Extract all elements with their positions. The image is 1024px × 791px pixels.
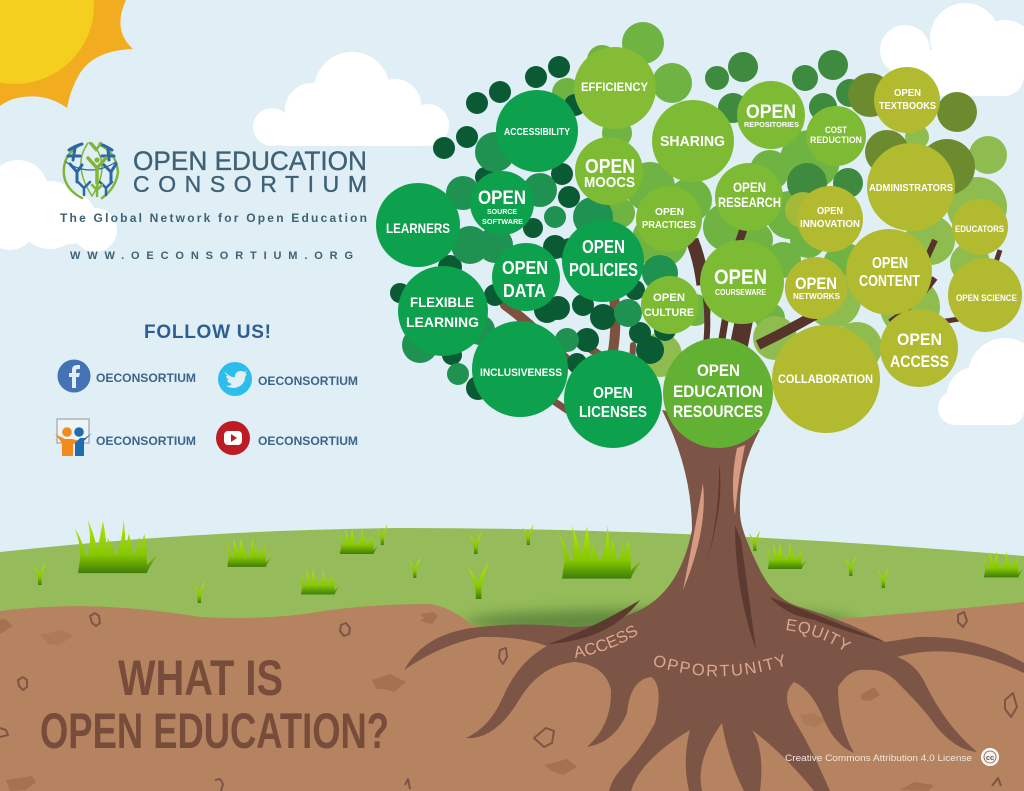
bubble: Inclusiveness: INCLUSIVENESS [480,367,562,379]
bubble: Open Source Software: SOFTWARE [482,217,523,226]
cloud: left [0,160,117,252]
bubble: Open Policies: OPEN [582,237,625,257]
icon: facebook [58,360,90,392]
bubble: Open Practices: OPEN [655,206,684,218]
icon: youtube [216,421,250,455]
bubble: Learners [376,183,460,267]
license text: Creative Commons Attribution 4.0 License [785,753,972,764]
bubble: Open MOOCs: OPEN [585,156,635,178]
green hill [0,528,1024,640]
bubble: Learners: LEARNERS [386,221,450,236]
bubble: Open Science [948,258,1022,332]
tree trunk and roots [404,410,1024,791]
bubble: Open Education Resources [663,338,773,448]
ground shadow [465,609,855,635]
root label: Opportunity: OPPORTUNITY [654,654,784,676]
bubble: Open Content: OPEN [872,255,908,272]
right branches [692,222,1000,350]
bubble: Educators: EDUCATORS [955,224,1004,234]
bubble: Open Licenses: OPEN [593,385,633,402]
bubble: Open Education Resources: RESOURCES [673,403,763,421]
bubble: Inclusiveness [472,321,568,417]
bubble: Administrators [867,143,955,231]
title [40,650,389,759]
bubble: Open Education Resources: EDUCATION [673,383,763,401]
bubble: Open Source Software [470,171,534,235]
bubble: Administrators: ADMINISTRATORS [869,182,953,194]
bubble: Open Research: RESEARCH [718,194,781,210]
cloud: top right [880,3,1024,96]
title: OPEN EDUCATION? [40,703,389,759]
bubble: Open Networks: OPEN [795,274,837,293]
bubble: Open Access: OPEN [897,330,942,349]
handle: facebook: OECONSORTIUM [96,371,196,385]
bubble: Open Access: ACCESS [890,352,949,371]
handle: youtube: OECONSORTIUM [258,434,358,448]
bubble: Sharing [652,100,734,182]
title: WHAT IS [118,650,283,706]
bubble: Open Innovation [797,186,863,252]
bubble: Accessibility [496,90,578,172]
sun [0,0,133,108]
bubble: Open Networks: NETWORKS [793,291,840,301]
soil [0,602,1024,791]
bubble: Open Data [492,243,560,311]
bubble: Open Innovation: OPEN [817,206,843,217]
logo globe [64,143,118,198]
bubble: Open Culture: OPEN [653,292,685,304]
bubble: Cost Reduction: REDUCTION [810,135,862,145]
bubble: Open Data: OPEN [502,258,548,278]
tree foliage background [390,22,1007,400]
tagline: The Global Network for Open Education [60,211,367,225]
handle: twitter: OECONSORTIUM [258,374,358,388]
bubble: Open Culture [641,276,699,334]
bubble: Open Repositories: REPOSITORIES [744,120,799,129]
soil stones and patches [0,612,1017,791]
bubble: Cost Reduction [806,106,866,166]
cloud: top centre [253,52,449,146]
bubble: Flexible Learning [398,266,488,356]
bubble: Open Networks [785,257,847,319]
logo wordmark [133,146,367,197]
follow us heading: FOLLOW US! [144,322,271,343]
bubble: Open Practices: PRACTICES [642,219,696,231]
bubble: Open Source Software: SOURCE [487,207,517,216]
bubble: Flexible Learning: FLEXIBLE [410,294,474,310]
bubble: Open Education Resources: OPEN [697,362,740,380]
bubble: Open Textbooks [874,67,940,133]
bubble: Efficiency: EFFICIENCY [581,80,648,94]
bubble: Flexible Learning: LEARNING [406,314,479,330]
bubble: Open Licenses [564,350,662,448]
logo wordmark: OPEN EDUCATION [133,146,367,176]
bubble: Open Access [880,309,958,387]
bubble: Sharing: SHARING [660,133,725,150]
bubble: Open Innovation: INNOVATION [800,219,860,230]
bubble: Open Source Software: OPEN [478,188,526,209]
cloud: lower right [938,338,1024,425]
bubble: Open Culture: CULTURE [644,307,694,319]
bubble: Collaboration [772,325,880,433]
bubble: Open Content [846,229,932,315]
bubble: Open Repositories [737,81,805,149]
bubble: Open Data: DATA [503,281,546,301]
icon: creative commons [982,748,998,766]
icon: twitter [218,362,252,396]
icon: creative commons: cc [986,753,994,762]
bubble: Open Practices [636,186,702,252]
bubble: Open Courseware [700,240,784,324]
bubble: Open Courseware: OPEN [714,266,767,289]
bubble: Open MOOCs: MOOCS [584,174,635,191]
handle: slideshare: OECONSORTIUM [96,434,196,448]
root label: Equity: EQUITY [786,618,852,650]
bubble: Open Research: OPEN [733,179,766,195]
root label: Access: ACCESS [575,626,638,658]
bubble: Open Policies: POLICIES [569,260,638,280]
bubble: Open Research [715,163,783,231]
bubble: Open Content: CONTENT [859,273,920,290]
icon: slideshare [55,419,92,456]
bubble: Open Textbooks: OPEN [894,88,921,99]
bubble: Open MOOCs [575,137,643,205]
website: WWW.OECONSORTIUM.ORG [70,250,353,262]
bubble: Open Policies [562,220,644,302]
bubble: Accessibility: ACCESSIBILITY [504,126,570,138]
bubble: Open Textbooks: TEXTBOOKS [879,101,936,112]
bubble: Open Repositories: OPEN [746,102,796,123]
grass tufts [33,520,1024,603]
bubble: Open Courseware: COURSEWARE [715,288,767,297]
bubble: Collaboration: COLLABORATION [778,374,873,386]
bubble: Cost Reduction: COST [825,125,847,135]
bubble: Open Licenses: LICENSES [579,404,647,421]
logo wordmark: CONSORTIUM [133,171,367,197]
bubble: Educators [952,199,1008,255]
left branches [505,295,633,412]
bubble: Efficiency [574,47,656,129]
